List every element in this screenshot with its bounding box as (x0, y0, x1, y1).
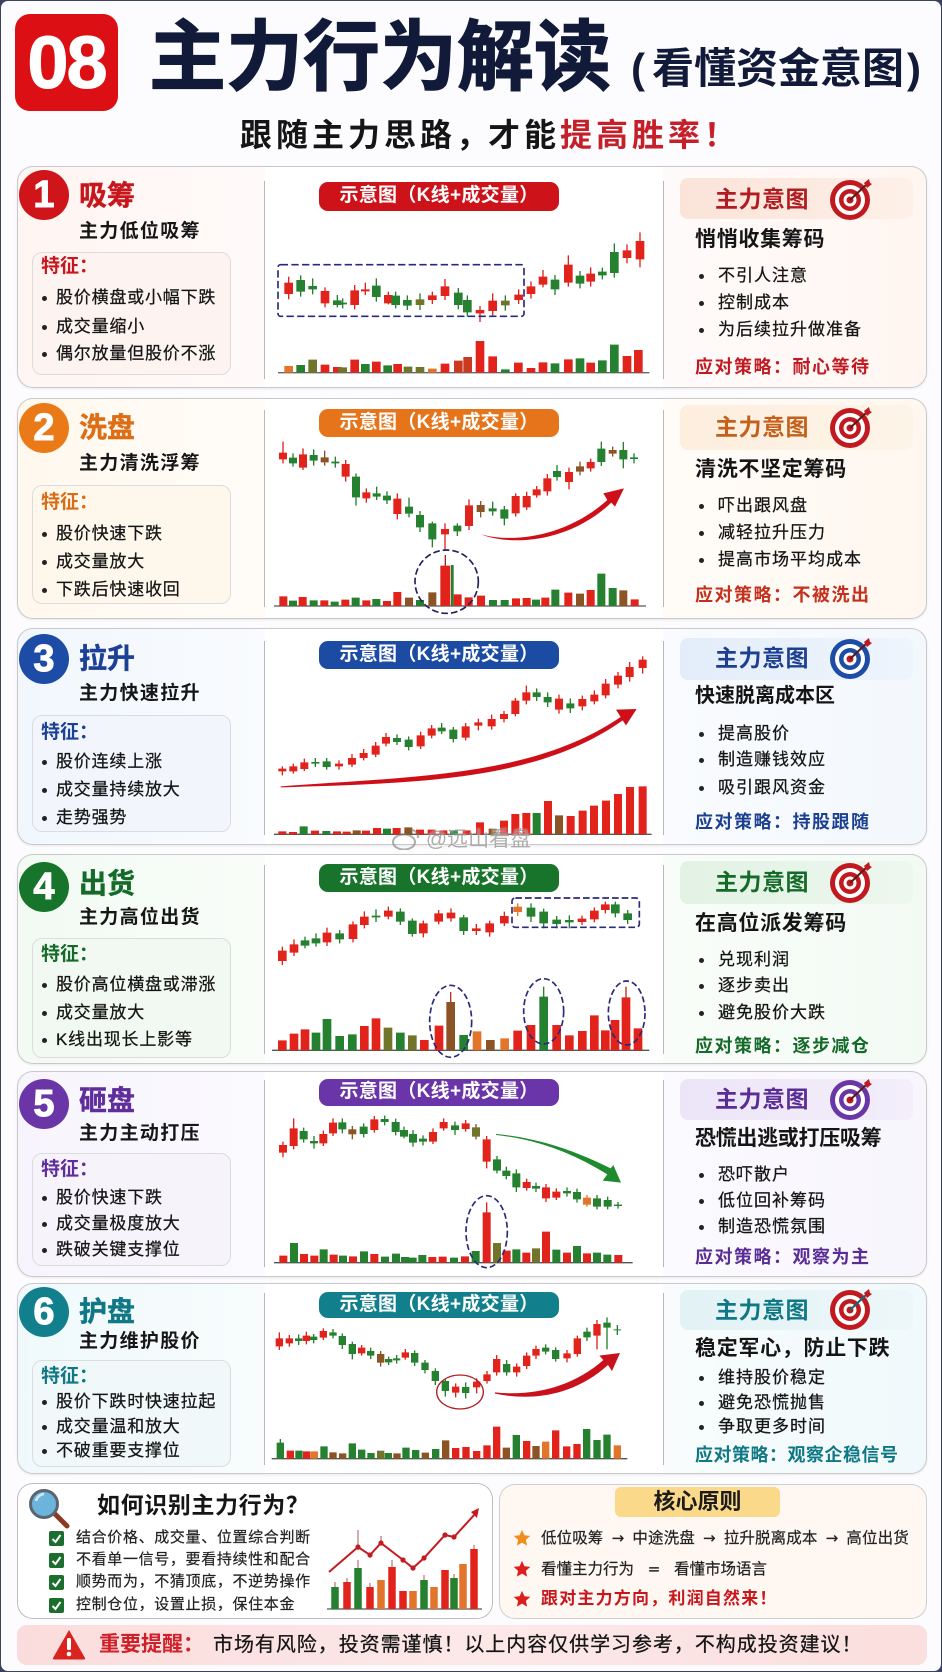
candlestick and volume chart (274, 656, 652, 835)
intent heading: 在高位派发筹码 (695, 912, 847, 935)
feature box (32, 1360, 231, 1467)
feature 1: 股价高位横盘或滞涨 (56, 975, 216, 994)
chart title pill (319, 1292, 559, 1318)
strategy: 应对策略：耐心等待 (695, 357, 870, 377)
warning text: 市场有风险，投资需谨慎！以上内容仅供学习参考，不构成投资建议！ (213, 1634, 862, 1656)
subtitle: 跟随主力思路，才能提高胜率！ (240, 117, 740, 153)
intent item 1: 吓出跟风盘 (718, 496, 808, 515)
principle 1: 低位吸筹 中途洗盘 拉升脱离成本 高位出货 (541, 1530, 909, 1547)
number 6: 6 (33, 1291, 55, 1333)
intent heading: 恐慌出逃或打压吸筹 (695, 1127, 881, 1150)
intent item 2: 逐步卖出 (718, 976, 790, 995)
intent item 2: 避免恐慌抛售 (718, 1393, 826, 1412)
icon: target (830, 638, 872, 679)
principles heading (615, 1487, 780, 1517)
strategy: 应对策略：不被洗出 (695, 585, 870, 605)
feature 1: 股价快速下跌 (56, 1188, 163, 1207)
intent header (680, 861, 913, 904)
warning label: 重要提醒： (99, 1633, 204, 1656)
intent heading: 清洗不坚定筹码 (695, 458, 847, 481)
heading: 洗盘 (79, 412, 135, 443)
feature label: 特征： (41, 256, 98, 277)
feature box (32, 715, 231, 832)
feature 3: 跌破关键支撑位 (56, 1240, 181, 1259)
feature box (32, 485, 231, 604)
check item 4: 控制仓位，设置止损，保住本金 (76, 1596, 295, 1613)
intent header (680, 178, 913, 219)
feature 1: 股价横盘或小幅下跌 (56, 288, 216, 307)
chart title pill (319, 1079, 559, 1106)
intent item 2: 减轻拉升压力 (718, 523, 826, 542)
intent item 2: 低位回补筹码 (718, 1191, 826, 1210)
heading: 护盘 (79, 1296, 135, 1327)
subheading: 主力低位吸筹 (79, 221, 201, 242)
feature 2: 成交量温和放大 (56, 1417, 181, 1436)
icon: target (830, 407, 872, 448)
subheading: 主力维护股价 (79, 1331, 201, 1352)
check item 3: 顺势而为，不猜顶底，不逆势操作 (76, 1573, 311, 1590)
feature 2: 成交量放大 (56, 1003, 145, 1022)
number 4: 4 (33, 866, 55, 908)
principle 2: = (648, 1560, 660, 1578)
title: 主力行为解读 (149, 15, 611, 101)
icon: target (830, 862, 872, 903)
chart title pill (319, 864, 559, 892)
feature label: 特征： (41, 492, 98, 513)
subheading: 主力主动打压 (79, 1123, 201, 1144)
intent item 2: 控制成本 (718, 293, 790, 312)
feature 2: 成交量放大 (56, 552, 145, 571)
feature box (32, 938, 231, 1058)
intent item 1: 提高股价 (718, 724, 790, 743)
feature label: 特征： (41, 1366, 98, 1387)
panel: 2 洗盘 (17, 398, 927, 619)
intent title: 主力意图 (715, 1086, 809, 1112)
panel: 5 砸盘 (17, 1071, 927, 1277)
strategy: 应对策略：持股跟随 (695, 812, 870, 832)
chart title pill (319, 182, 559, 211)
question heading: 如何识别主力行为？ (97, 1492, 309, 1518)
feature 1: 股价连续上涨 (56, 752, 163, 771)
panel: core principles (499, 1484, 927, 1619)
number 3: 3 (33, 638, 55, 680)
number 6 (19, 1287, 69, 1337)
intent title: 主力意图 (715, 186, 809, 212)
mini chart (327, 1508, 482, 1610)
intent item 3: 为后续拉升做准备 (718, 320, 862, 339)
candlestick and volume chart (277, 232, 650, 374)
number 1: 1 (33, 174, 55, 216)
panel: 4 出货 (17, 854, 927, 1064)
intent item 3: 提高市场平均成本 (718, 550, 862, 569)
intent heading: 悄悄收集筹码 (695, 228, 825, 251)
intent title: 主力意图 (715, 869, 809, 895)
panel: how to identify (17, 1483, 493, 1619)
subheading: 主力高位出货 (79, 907, 201, 928)
feature 3: K线出现长上影等 (56, 1030, 193, 1049)
feature 2: 成交量缩小 (56, 317, 145, 336)
feature 3: 走势强势 (56, 808, 127, 827)
heading: 砸盘 (79, 1085, 135, 1116)
chart title pill (319, 409, 559, 437)
chart title pill: 示意图（K线+成交量） (339, 1294, 539, 1315)
intent title: 主力意图 (715, 414, 809, 440)
check item 2: 不看单一信号，要看持续性和配合 (76, 1551, 311, 1568)
intent header (680, 1290, 913, 1330)
principle 1: → (703, 1529, 716, 1547)
title suffix: ) (907, 45, 921, 92)
intent item 3: 吸引跟风资金 (718, 778, 826, 797)
badge: 08 (15, 14, 118, 111)
number 3 (19, 634, 69, 684)
feature label: 特征： (41, 722, 98, 743)
strategy: 应对策略：观察企稳信号 (695, 1445, 898, 1465)
icon: magnifier (29, 1489, 70, 1528)
chart title pill: 示意图（K线+成交量） (339, 412, 539, 433)
intent heading: 快速脱离成本区 (695, 685, 835, 707)
badge: 08: 08 (27, 21, 106, 104)
feature 1: 股价快速下跌 (56, 524, 163, 543)
intent item 1: 恐吓散户 (718, 1165, 790, 1184)
candlestick and volume chart (274, 1116, 633, 1268)
icon: target (830, 1079, 872, 1120)
principles heading: 核心原则 (653, 1489, 742, 1514)
watermark: @远山看盘 (426, 828, 531, 851)
feature 3: 偶尔放量但股价不涨 (56, 344, 216, 363)
intent heading: 稳定军心，防止下跌 (695, 1337, 890, 1360)
icon: target (830, 179, 872, 220)
chart title pill (319, 641, 559, 669)
intent header (680, 405, 913, 450)
heading: 拉升 (79, 643, 135, 674)
title suffix: ( (631, 45, 645, 92)
feature 1: 股价下跌时快速拉起 (56, 1392, 216, 1411)
intent header (680, 638, 913, 680)
icon: target (830, 1289, 872, 1330)
chart title pill: 示意图（K线+成交量） (339, 1081, 539, 1102)
intent item 3: 避免股价大跌 (718, 1003, 826, 1022)
subheading: 主力快速拉升 (79, 683, 201, 704)
warning banner (17, 1625, 927, 1665)
candlestick and volume chart (272, 897, 650, 1058)
feature label: 特征： (41, 944, 98, 965)
principle 1: → (826, 1529, 838, 1547)
intent item 1: 维持股价稳定 (718, 1368, 826, 1387)
number 5: 5 (33, 1083, 55, 1125)
strategy: 应对策略：观察为主 (695, 1247, 870, 1267)
feature 2: 成交量持续放大 (56, 780, 181, 799)
panel: 6 护盘 (17, 1283, 927, 1474)
intent item 3: 制造恐慌氛围 (718, 1217, 826, 1236)
feature box (32, 1153, 231, 1266)
intent item 3: 争取更多时间 (718, 1417, 826, 1436)
chart title pill: 示意图（K线+成交量） (339, 867, 539, 888)
candlestick and volume chart (272, 1317, 628, 1460)
title suffix: 看懂资金意图 (652, 45, 904, 92)
icon: warning triangle (52, 1630, 86, 1660)
number 5 (19, 1079, 69, 1129)
number 4 (19, 862, 69, 912)
chart title pill: 示意图（K线+成交量） (339, 185, 539, 206)
feature 3: 不破重要支撑位 (56, 1441, 181, 1460)
heading: 出货 (79, 868, 135, 899)
intent item 1: 不引人注意 (718, 266, 808, 285)
feature 2: 成交量极度放大 (56, 1214, 181, 1233)
principle 3: 跟对主力方向，利润自然来！ (541, 1589, 778, 1608)
principle 2: 看懂主力行为 看懂市场语言 (541, 1561, 767, 1578)
feature 3: 下跌后快速收回 (56, 580, 181, 599)
intent title: 主力意图 (715, 645, 809, 671)
feature label: 特征： (41, 1159, 98, 1180)
number 2: 2 (33, 407, 55, 449)
panel: 1 吸筹 (17, 166, 927, 388)
intent header (680, 1079, 913, 1120)
panel: 3 拉升 (17, 628, 927, 845)
check item 1: 结合价格、成交量、位置综合判断 (76, 1529, 311, 1546)
chart title pill: 示意图（K线+成交量） (339, 644, 539, 665)
heading: 吸筹 (79, 180, 135, 211)
intent item 1: 兑现利润 (718, 950, 790, 969)
candlestick and volume chart (274, 442, 646, 614)
number 1 (19, 170, 69, 220)
principle 1: → (612, 1529, 624, 1547)
intent item 2: 制造赚钱效应 (718, 750, 826, 769)
strategy: 应对策略：逐步减仓 (695, 1036, 870, 1056)
intent title: 主力意图 (715, 1297, 809, 1323)
subheading: 主力清洗浮筹 (79, 453, 201, 474)
feature box (32, 252, 231, 375)
number 2 (19, 403, 69, 453)
